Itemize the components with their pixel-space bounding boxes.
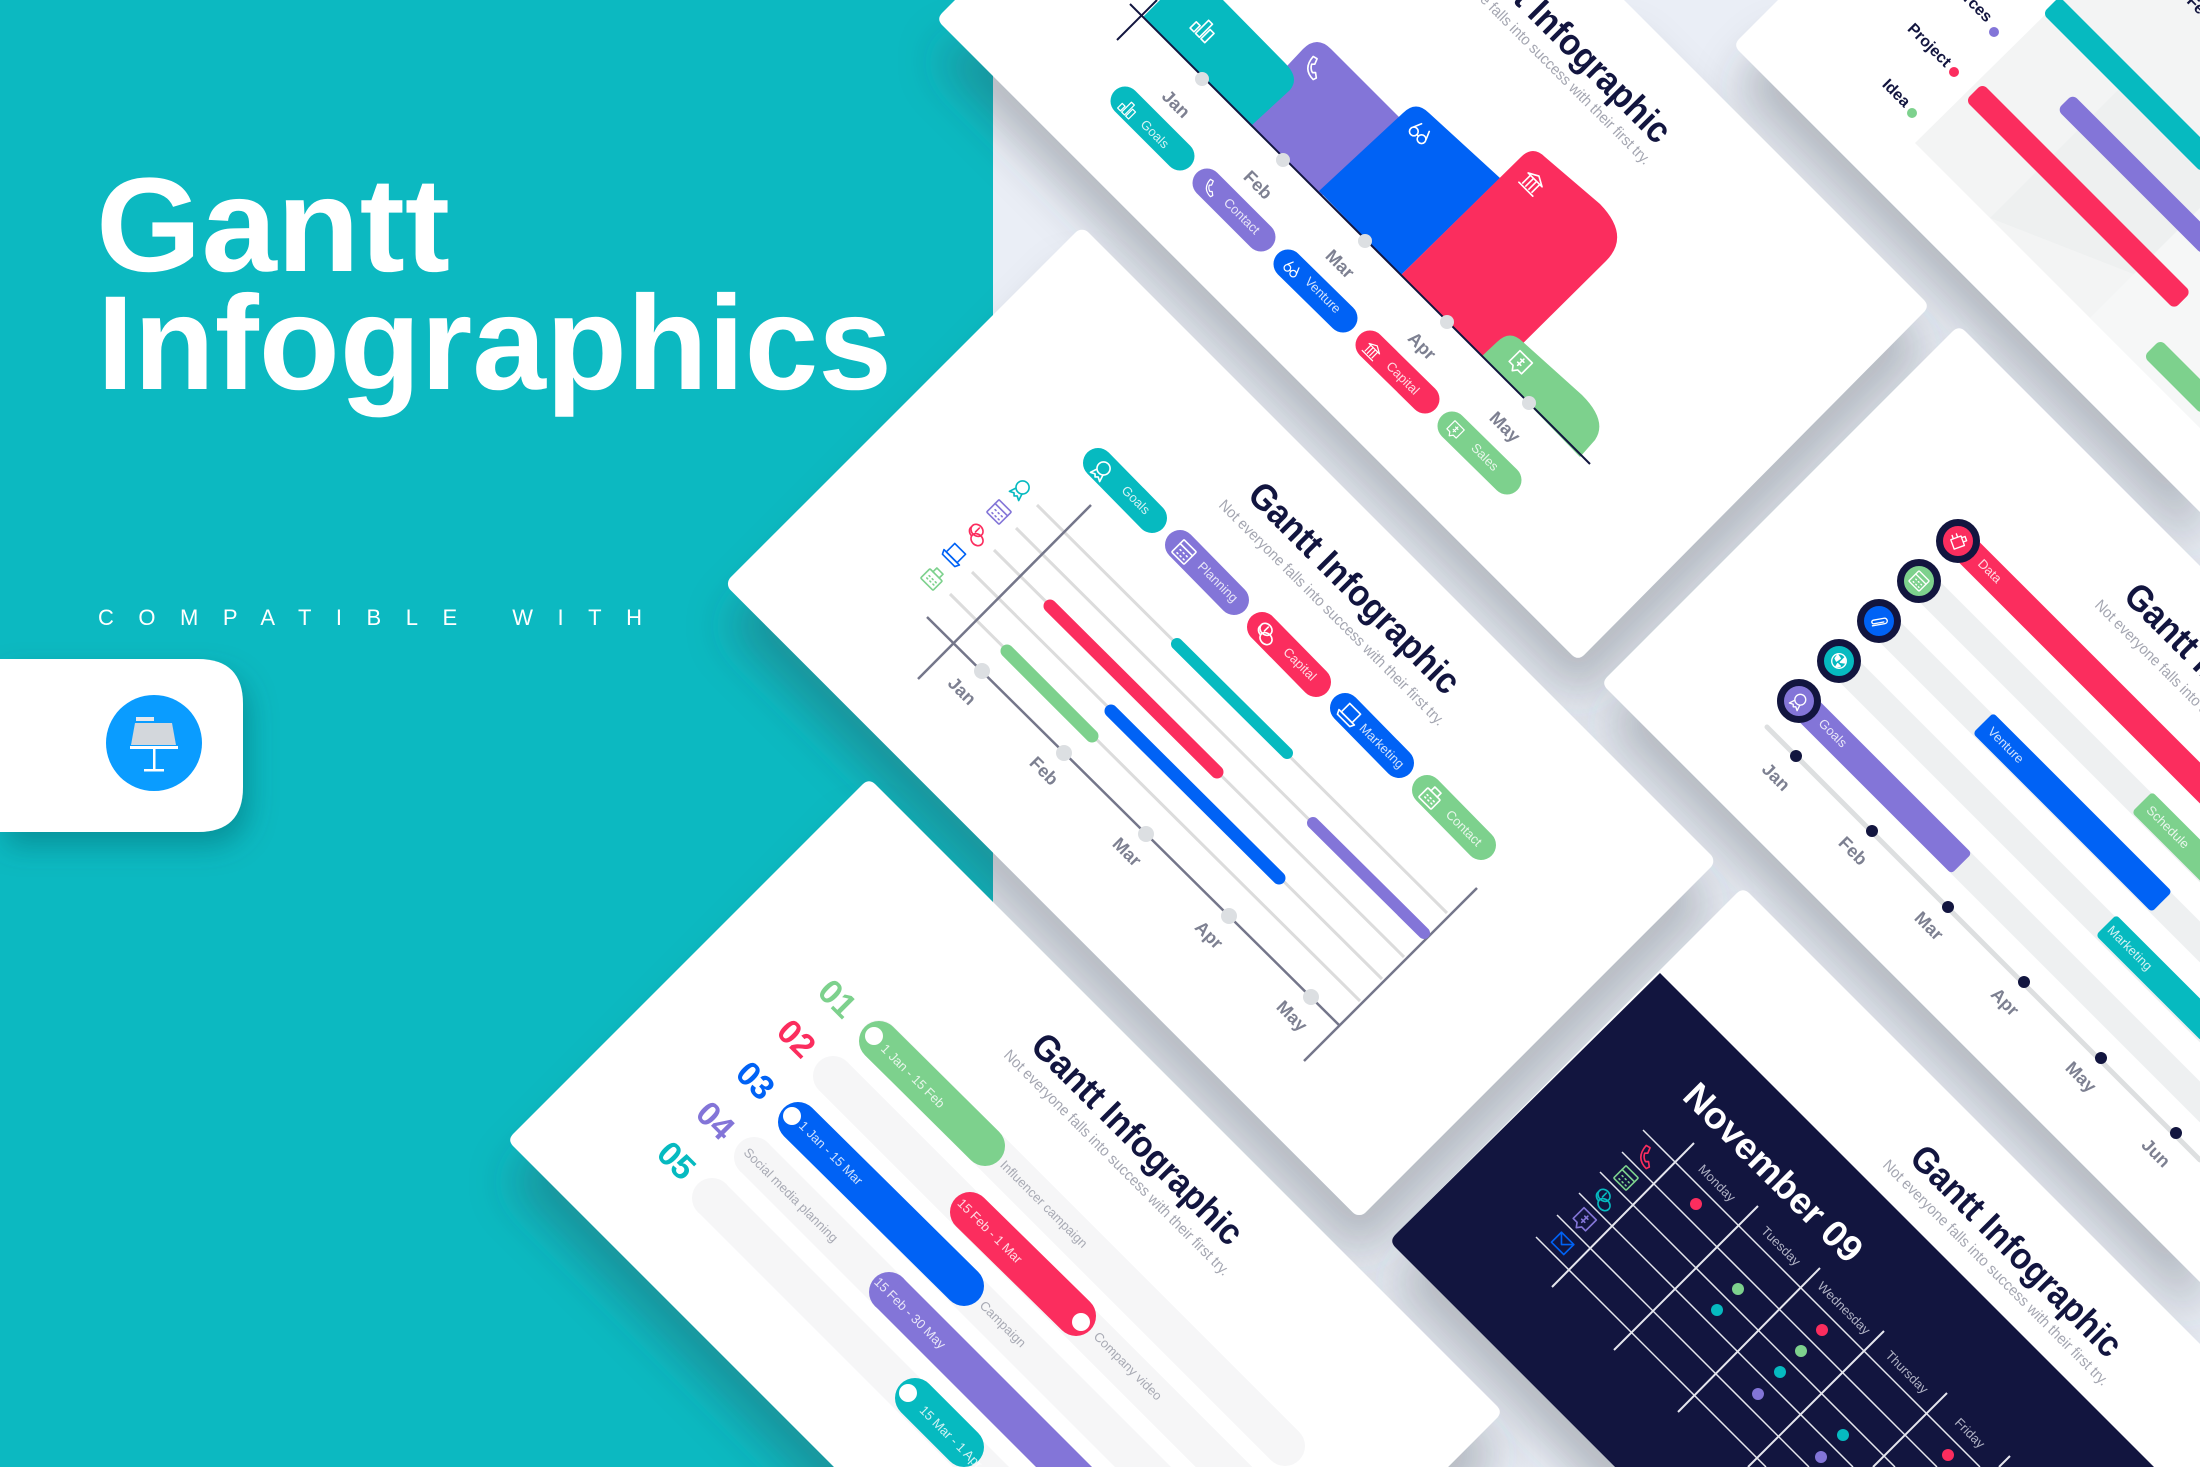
row numbers: 03 (728, 1054, 782, 1108)
timeline axis: Mar (1911, 908, 1947, 944)
teal background panel (0, 0, 993, 1467)
gantt bars (1007, 606, 1424, 933)
task names: Campaign (977, 1298, 1029, 1350)
task bars: Goals (1816, 716, 1851, 751)
task bars: Marketing (2105, 923, 2155, 973)
row tracks (692, 1040, 1285, 1467)
keynote badge (0, 659, 243, 832)
task bars: Venture (1985, 724, 2027, 766)
top card pills: Venture (1302, 274, 1344, 316)
calendar row icons (1551, 1145, 1659, 1255)
centre card heading: Not everyone falls into success with their first try. (1215, 497, 1448, 729)
task names (741, 1145, 1165, 1403)
dark calendar panel (1392, 973, 2154, 1467)
compatible with caption: COMPATIBLE WITH (98, 605, 642, 630)
grid lines (950, 505, 1447, 1001)
panel: centre card with thin bars (724, 226, 1717, 1219)
row numbers: 02 (769, 1012, 823, 1066)
bottom left heading: Gantt Infographic (1023, 1025, 1252, 1253)
calendar dots (1690, 1198, 1954, 1463)
pill dates: 1 Jan - 15 Mar (796, 1118, 866, 1188)
title: Infographics (97, 269, 892, 418)
axes (918, 505, 1477, 1061)
title (96, 151, 892, 418)
weekday labels: Thursday (1883, 1348, 1932, 1397)
pill dates: 15 Feb - 30 May (871, 1274, 949, 1352)
month markers: Apr (1191, 917, 1227, 953)
timeline axis: Jan (1758, 759, 1794, 795)
row pills (798, 1041, 1092, 1467)
timeline axis (1758, 727, 2200, 1171)
category pills: Capital (1280, 644, 1320, 684)
track rows (1799, 581, 2200, 1112)
task names: Influencer campaign (997, 1157, 1091, 1251)
top card axis: Feb (1240, 167, 1276, 203)
top card pills: Capital (1383, 358, 1423, 398)
task bars: Data (1975, 556, 2006, 587)
bottom right heading: Not everyone falls into success with their first try. (1879, 1157, 2112, 1389)
category pills (1090, 459, 1485, 849)
month markers (944, 663, 1319, 1035)
centre card heading: Gantt Infographic (1240, 474, 1469, 702)
task names: Social media planning (741, 1145, 841, 1245)
top card pills: Goals (1138, 117, 1173, 152)
row numbers: 01 (810, 972, 864, 1026)
panel: top right card with legend and bars: Idea (1879, 76, 1913, 111)
month markers: Jan (944, 673, 980, 709)
top card axis: Jan (1158, 86, 1194, 122)
top card block icons (1190, 15, 1546, 377)
weekday labels: Tuesday (1758, 1223, 1804, 1269)
task bars: Schedule (2144, 803, 2192, 851)
task names: Company video (1091, 1329, 1165, 1403)
pill dates: 1 Jan - 15 Feb (878, 1041, 948, 1111)
month markers: May (1273, 997, 1311, 1035)
pill dates (796, 1041, 1026, 1467)
weekday labels: Friday (1952, 1415, 1988, 1451)
category pills: Planning (1195, 559, 1241, 605)
category pills: Goals (1119, 483, 1154, 518)
row numbers (649, 972, 864, 1188)
panel: top card with stacked blocks (939, 0, 1927, 658)
task bars (1789, 531, 2200, 1041)
top card pills (1118, 98, 1507, 480)
panel: top right card with legend and bars (1736, 0, 2200, 512)
panel: bottom left card with numbered rows (510, 781, 1500, 1467)
panel: top right card with legend and bars: Project (1904, 20, 1955, 71)
panel: right card with ring markers (1604, 328, 2200, 1282)
timeline axis: May (2062, 1058, 2100, 1096)
top card axis: May (1486, 408, 1524, 446)
bottom right heading: Gantt Infographic (1902, 1137, 2131, 1365)
row numbers: 05 (649, 1134, 703, 1188)
calendar grid (1536, 1130, 2010, 1467)
top card axis (1117, 0, 1590, 464)
month markers: Feb (1026, 753, 1062, 789)
timeline axis: Feb (1835, 833, 1871, 869)
top card pills: Sales (1468, 440, 1502, 474)
stacked blocks (1143, 0, 1617, 457)
row icons (921, 478, 1032, 590)
weekday labels: Wednesday (1815, 1279, 1874, 1338)
pill dates: 15 Feb - 1 Mar (955, 1196, 1026, 1267)
category pills: Marketing (1357, 721, 1407, 771)
timeline axis: Apr (1987, 984, 2023, 1020)
bottom left heading: Not everyone falls into success with their first try. (1000, 1047, 1233, 1279)
weekday labels: Monday (1695, 1161, 1739, 1205)
category pills: Contact (1443, 807, 1485, 849)
ring markers (1780, 522, 1976, 720)
top card axis: Mar (1322, 246, 1358, 282)
pill start markers (783, 1027, 1090, 1402)
row numbers: 04 (688, 1094, 742, 1148)
panel: bottom right card with dark calendar (1392, 890, 2200, 1467)
timeline axis: Jun (2138, 1135, 2174, 1171)
top card pills: Contact (1221, 195, 1263, 237)
month markers: Mar (1109, 834, 1145, 870)
top card axis: Apr (1404, 328, 1440, 364)
weekday labels (1695, 1161, 1988, 1451)
calendar heading: November 09 (1675, 1075, 1871, 1271)
title: Gantt (96, 151, 450, 300)
